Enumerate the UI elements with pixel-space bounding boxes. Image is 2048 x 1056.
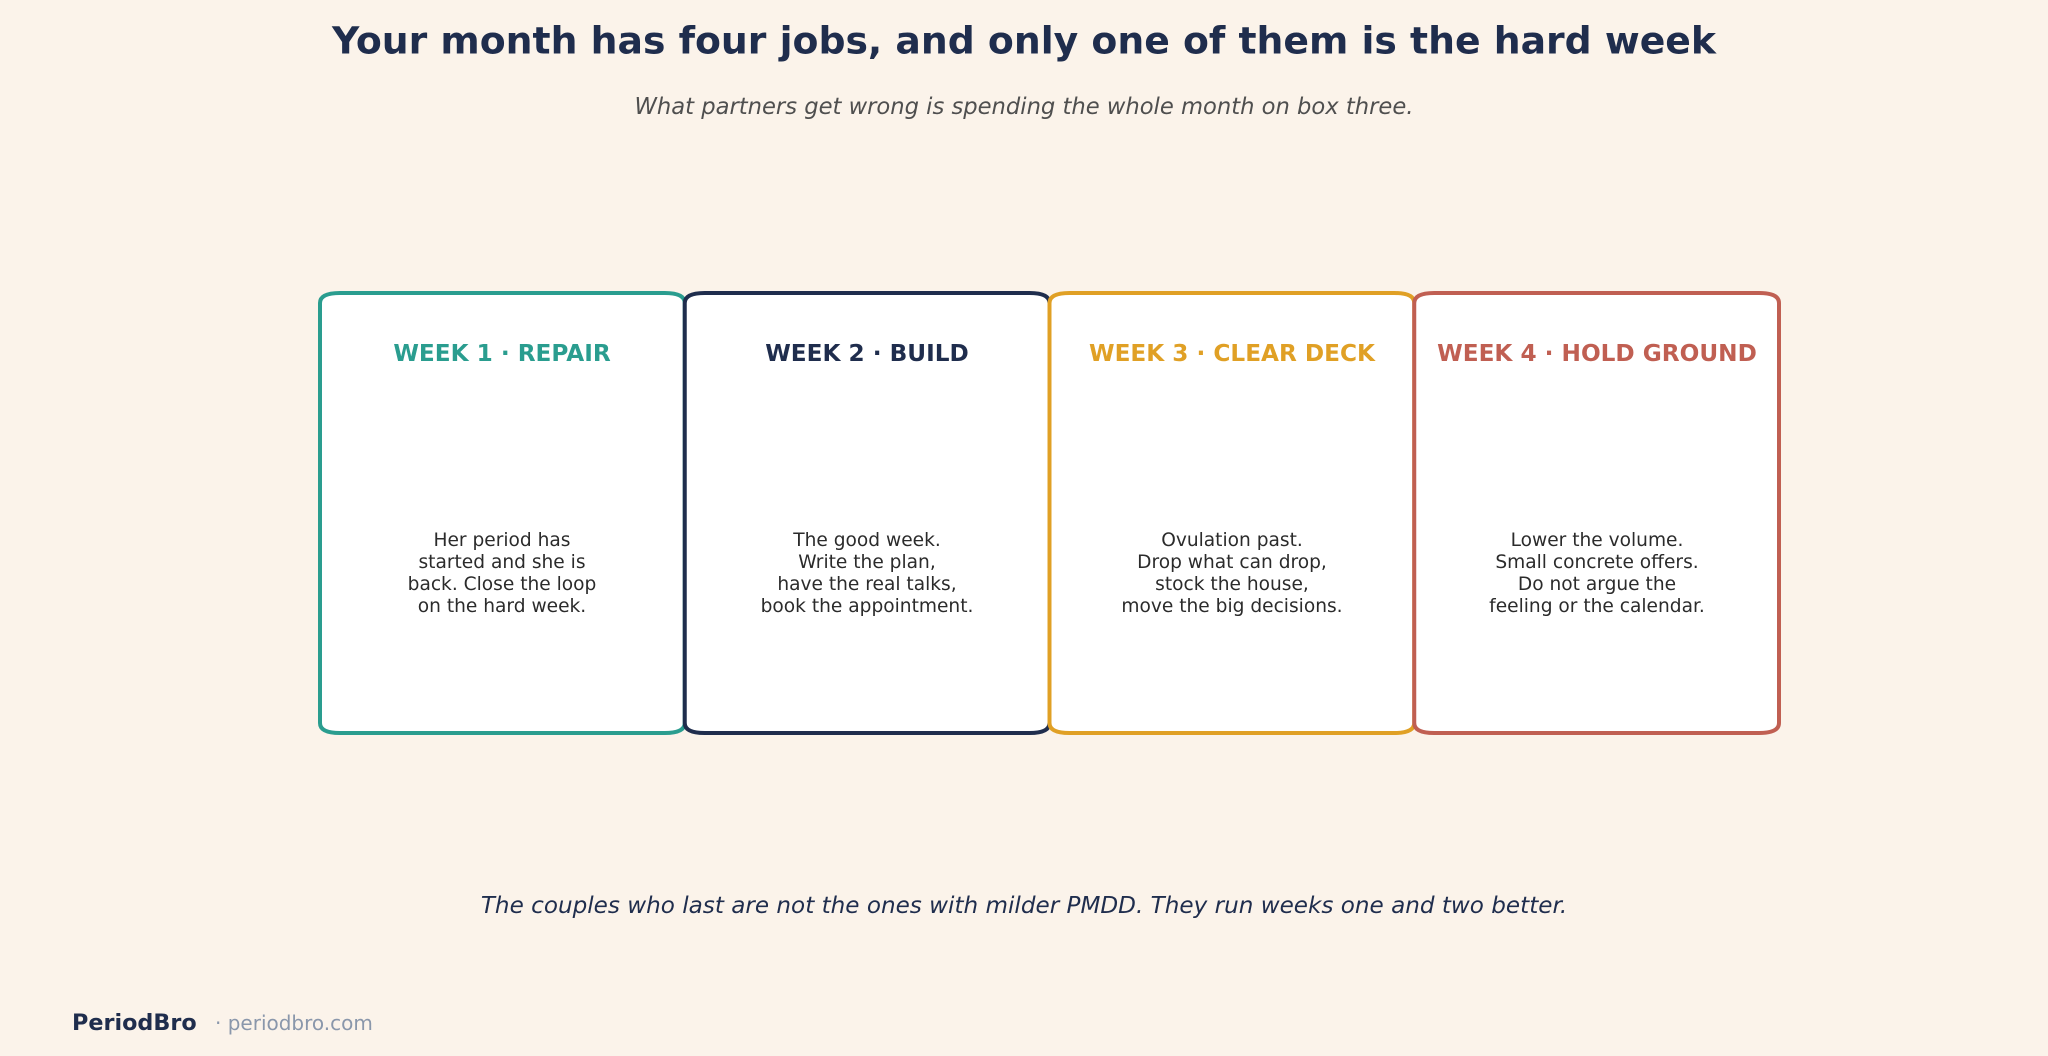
heading: week 4: WEEK 4 · HOLD GROUND [1437,340,1757,367]
text: week 3 body: Drop what can drop, [1137,552,1327,573]
footer brand: · periodbro.com [215,1011,373,1035]
panel: week 4 hold ground [1414,293,1779,733]
closing line: The couples who last are not the ones with milder PMDD. They run weeks one and two better. [481,893,1567,919]
text: week 2 body: have the real talks, [777,574,957,595]
text: week 1 body: back. Close the loop [408,574,596,595]
panel: week 1 repair [320,293,685,733]
text: week 4 body: Small concrete offers. [1495,552,1699,573]
text: week 2 body: The good week. [792,530,941,551]
heading: week 1: WEEK 1 · REPAIR [393,340,611,367]
footer brand: PeriodBro [72,1010,197,1036]
subtitle: What partners get wrong is spending the whole month on box three. [635,94,1413,120]
text: week 3 body: move the big decisions. [1121,596,1343,617]
text: week 2 body: Write the plan, [798,552,936,573]
text: week 1 body: Her period has [434,530,570,551]
footer brand [72,1010,373,1036]
text: week 1 body: started and she is [418,552,586,573]
text: week 3 body: Ovulation past. [1161,530,1303,551]
text: week 2 body: book the appointment. [761,596,973,617]
text: week 4 body: feeling or the calendar. [1489,596,1705,617]
panel: week 2 build [685,293,1050,733]
heading: week 2: WEEK 2 · BUILD [765,340,969,367]
heading: week 3: WEEK 3 · CLEAR DECK [1089,340,1376,367]
text: week 1 body: on the hard week. [418,596,586,617]
text: week 3 body: stock the house, [1155,574,1309,595]
title: Your month has four jobs, and only one of them is the hard week [331,18,1717,62]
text: week 4 body: Do not argue the [1518,574,1676,595]
panel: week 3 clear deck [1050,293,1414,733]
text: week 4 body: Lower the volume. [1511,530,1683,551]
